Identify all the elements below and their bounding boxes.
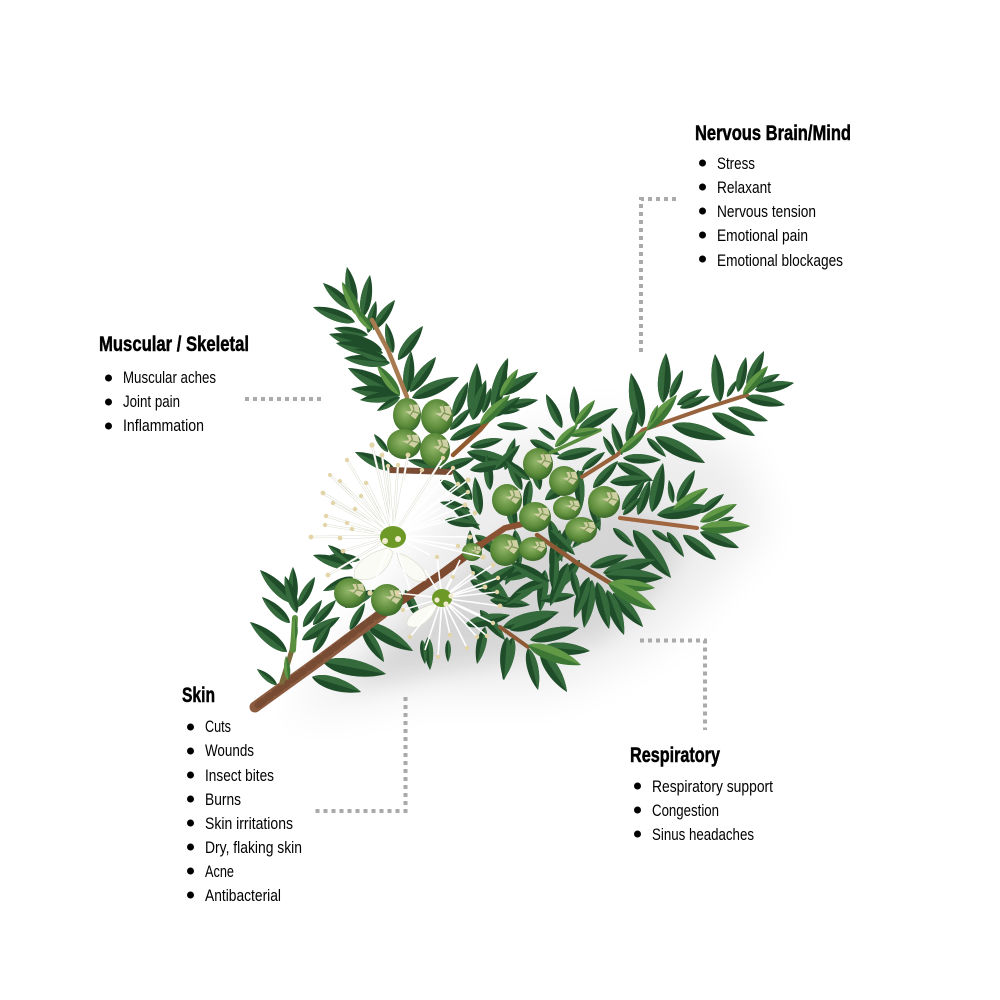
bullet list: Stress <box>717 155 755 173</box>
bullet list: Respiratory support <box>652 778 773 796</box>
stamen tips <box>395 555 502 659</box>
bullet list: Insect bites <box>205 767 274 785</box>
bullet list: Acne <box>205 863 234 881</box>
flower buds <box>334 398 620 616</box>
bullet list: Sinus headaches <box>652 826 754 844</box>
heading: Muscular / Skeletal <box>99 333 249 356</box>
bullet list: Emotional pain <box>717 227 808 245</box>
dark foliage: centre branches <box>329 356 621 643</box>
bullet list: Burns <box>205 791 241 809</box>
bullet list: Muscular aches <box>123 369 216 387</box>
bullet list <box>105 369 216 435</box>
connector: respiratory <box>640 640 705 730</box>
bullet list: Cuts <box>205 718 231 736</box>
dark foliage: lower left branch <box>246 542 417 698</box>
bullet list: Relaxant <box>717 179 771 197</box>
small white flower <box>395 555 502 659</box>
flower centre <box>432 589 452 607</box>
bullet list: Nervous tension <box>717 203 816 221</box>
flower centre <box>380 526 406 548</box>
panel: nervous brain/mind <box>695 122 851 270</box>
heading: Nervous Brain/Mind <box>695 122 851 145</box>
woody stems <box>255 320 747 707</box>
dark foliage: lower centre branches <box>419 550 663 695</box>
connector: nervous brain/mind <box>641 199 676 354</box>
petals <box>354 548 426 581</box>
heading: Skin <box>182 684 215 707</box>
tea tree sprig illustration <box>246 266 795 707</box>
bullet list: Congestion <box>652 802 719 820</box>
stamen tips <box>309 442 486 596</box>
dark foliage: right lower branch <box>611 462 741 583</box>
dark foliage: upper left branch <box>311 266 462 414</box>
stamens <box>397 557 500 657</box>
plant shadow <box>290 420 765 715</box>
stamen outlines <box>311 445 443 575</box>
dark foliage: right upper branch <box>580 349 795 491</box>
bullet list: Emotional blockages <box>717 252 843 270</box>
heading: Respiratory <box>630 744 720 767</box>
bullet list: Skin irritations <box>205 815 293 833</box>
bullet list: Inflammation <box>123 417 204 435</box>
bullet list: Wounds <box>205 742 254 760</box>
stamens <box>311 445 483 593</box>
large white flower <box>309 442 486 596</box>
connector: skin <box>315 697 406 811</box>
bullet list <box>634 778 773 844</box>
panel: skin <box>182 684 302 905</box>
panel: respiratory <box>630 744 773 844</box>
bullet list: Antibacterial <box>205 887 281 905</box>
bullet list <box>187 718 302 905</box>
bullet list <box>699 155 843 270</box>
bullet list: Joint pain <box>123 393 180 411</box>
panel: muscular / skeletal <box>99 333 249 435</box>
petal <box>407 603 438 627</box>
light foliage highlights <box>283 280 772 680</box>
bullet list: Dry, flaking skin <box>205 839 302 857</box>
connector: muscular / skeletal <box>245 397 322 401</box>
